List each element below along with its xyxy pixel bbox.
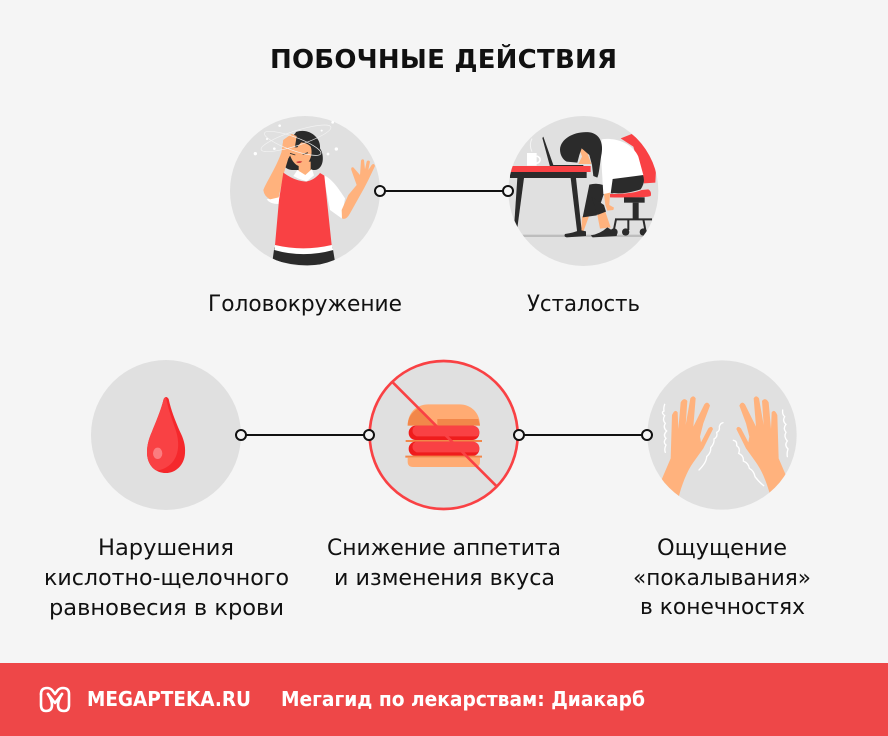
label: fatigue: Усталость: [527, 292, 640, 317]
label: dizziness: Головокружение: [208, 292, 402, 317]
footer band: [0, 663, 888, 736]
label: appetite: [327, 536, 561, 591]
icon: tired person at desk: [508, 116, 658, 266]
connector: appetite to hands: [514, 430, 652, 440]
label: blood balance: кислотно-щелочного: [44, 566, 289, 591]
connector: blood to appetite: [236, 430, 374, 440]
label: blood balance: [44, 536, 289, 621]
label: blood balance: Нарушения: [98, 536, 234, 561]
label: tingling: в конечностях: [640, 595, 805, 620]
brand name: MEGAPTEKA.RU: [87, 687, 251, 711]
label: tingling: Ощущение: [657, 536, 787, 561]
label: blood balance: равновесия в крови: [49, 596, 284, 621]
icon: crossed-out burger: [370, 361, 518, 509]
icon: Megapteka logo: [41, 688, 69, 711]
label: tingling: «покалывания»: [633, 566, 811, 591]
panel: fatigue: [508, 116, 658, 317]
icon: dizzy woman: [230, 116, 380, 266]
label: appetite: Снижение аппетита: [327, 536, 561, 561]
panel: tingling: [633, 360, 811, 620]
connector: dizziness to fatigue: [375, 186, 513, 196]
icon: blood drop: [91, 360, 241, 510]
panel: dizziness: [208, 116, 402, 317]
footer guide title: Мегагид по лекарствам: Диакарб: [281, 687, 645, 711]
panel: appetite: [327, 361, 561, 591]
label: tingling: [633, 536, 811, 620]
label: appetite: и изменения вкуса: [334, 566, 555, 591]
title: ПОБОЧНЫЕ ДЕЙСТВИЯ: [270, 43, 617, 75]
panel: blood balance: [44, 360, 289, 621]
icon: tingling hands: [647, 360, 797, 510]
